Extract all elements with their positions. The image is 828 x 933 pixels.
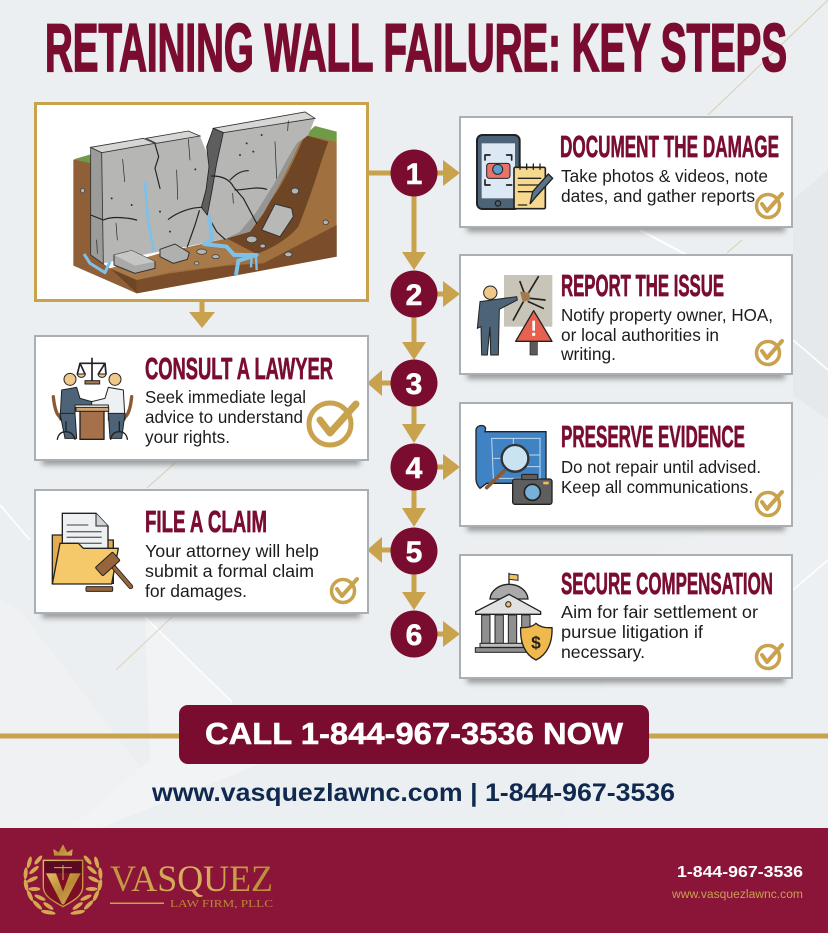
call to action band <box>0 705 828 764</box>
icon: check <box>756 492 782 516</box>
logo wordmark: VASQUEZ <box>110 859 273 900</box>
body text: dates, and gather reports <box>561 186 755 206</box>
icon: phone and notepad <box>477 135 553 209</box>
body text <box>145 541 319 601</box>
step 3: 3 <box>406 368 422 401</box>
step 2 <box>390 270 438 318</box>
panel: retaining wall illustration <box>36 104 368 300</box>
step number circles <box>390 150 438 658</box>
body text: or local authorities in <box>561 325 719 345</box>
body text <box>561 457 761 497</box>
body text: Your attorney will help <box>145 541 319 561</box>
body text: your rights. <box>145 427 230 447</box>
icon: folder and gavel <box>52 513 131 591</box>
body text <box>561 166 768 206</box>
body text: Seek immediate legal <box>145 387 306 407</box>
footer contact: 1-844-967-3536 <box>677 864 803 881</box>
footer band <box>0 828 828 933</box>
step 4 <box>390 444 438 490</box>
step 5 <box>390 528 438 574</box>
step 5: 5 <box>406 536 422 569</box>
illustration: cracked retaining wall <box>73 112 337 293</box>
body text: Aim for fair settlement or <box>561 602 758 622</box>
panel: document the damage <box>460 117 792 232</box>
body text <box>561 602 758 662</box>
step 1 <box>390 150 438 196</box>
icon: check large <box>309 403 356 445</box>
panel: consult a lawyer <box>35 336 368 465</box>
body text: necessary. <box>561 642 645 662</box>
body text <box>145 387 306 447</box>
panel: report the issue <box>460 255 792 379</box>
panel: preserve evidence <box>460 403 792 531</box>
footer contact: www.vasquezlawnc.com <box>671 889 803 901</box>
heading: CONSULT A LAWYER <box>145 352 333 386</box>
icon: lawyer meeting <box>53 358 132 439</box>
logo <box>23 844 273 916</box>
icon: person reporting crack <box>477 275 552 355</box>
body text <box>560 305 773 364</box>
call to action band: CALL 1-844-967-3536 NOW <box>205 716 624 751</box>
icon: check <box>756 341 782 364</box>
body text: Do not repair until advised. <box>561 457 761 477</box>
step 4: 4 <box>406 452 423 485</box>
icon: courthouse and shield: $ <box>531 632 541 652</box>
flow connectors and arrows <box>189 160 460 647</box>
icon: blueprint magnifier camera <box>476 426 552 504</box>
icon: check <box>332 579 357 602</box>
panel: file a claim <box>35 490 368 618</box>
heading: FILE A CLAIM <box>145 505 267 539</box>
icon: courthouse and shield <box>475 573 552 660</box>
step 3 <box>390 360 438 406</box>
step 2: 2 <box>406 279 422 312</box>
body text: Keep all communications. <box>561 477 753 497</box>
body text: submit a formal claim <box>145 561 314 581</box>
icon: check <box>756 194 782 218</box>
body text: pursue litigation if <box>561 622 703 642</box>
logo crest <box>23 844 103 916</box>
icon: check <box>756 645 782 668</box>
body text: advice to understand <box>145 407 303 427</box>
panel: secure compensation <box>460 555 792 683</box>
step 6 <box>390 610 438 658</box>
body text: Notify property owner, HOA, <box>561 305 773 325</box>
step 1: 1 <box>406 158 422 191</box>
logo: LAW FIRM, PLLC <box>170 899 273 910</box>
step 6: 6 <box>406 619 422 652</box>
body text: Take photos & videos, note <box>561 166 768 186</box>
website and phone line: www.vasquezlawnc.com | 1-844-967-3536 <box>151 779 675 807</box>
body text: writing. <box>560 344 616 364</box>
body text: for damages. <box>145 581 247 601</box>
footer contact <box>671 864 803 901</box>
